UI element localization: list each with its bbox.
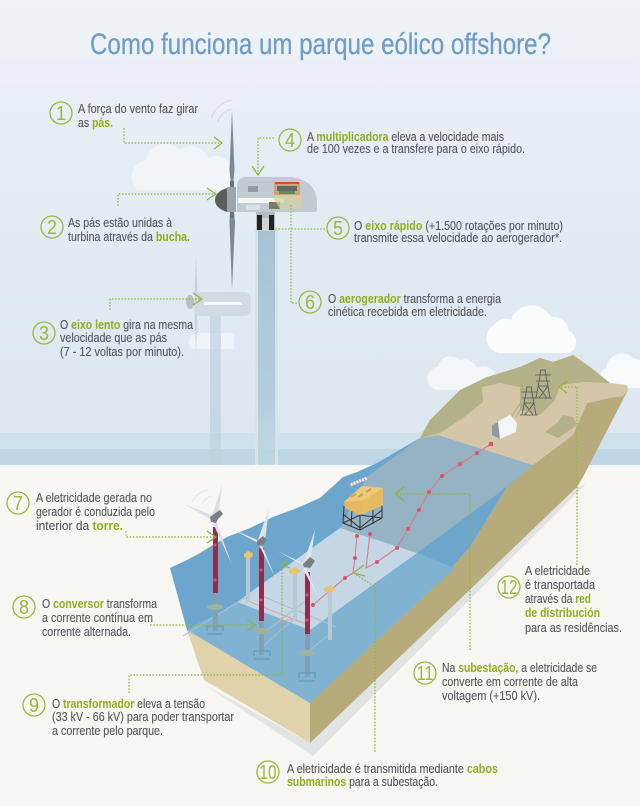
offshore turbine 2 — [232, 508, 275, 659]
step 9 — [23, 694, 234, 738]
beach — [420, 355, 628, 465]
step 3: O eixo lento gira na mesma — [60, 318, 193, 332]
step 7: A eletricidade gerada no — [36, 491, 152, 505]
step 4: de 100 vezes e a transfere para o eixo rápido. — [307, 142, 525, 156]
step 1: 1 — [56, 103, 66, 125]
large turbine — [211, 100, 317, 465]
gearbox — [274, 182, 300, 195]
step 4: A multiplicadora eleva a velocidade mais — [307, 130, 504, 144]
step 5: transmite essa velocidade ao aerogerador*. — [354, 231, 562, 245]
step 12: é transportada — [525, 578, 595, 592]
cable lane — [237, 528, 417, 630]
small pylons with transformers — [244, 551, 336, 640]
step 11: converte em corrente de alta — [442, 675, 578, 689]
blades — [230, 110, 235, 290]
background sky — [0, 0, 640, 433]
step 8: a corrente contínua em — [42, 611, 153, 625]
leader 8 — [150, 619, 256, 631]
step 9: (33 kV - 66 kV) para poder transportar — [52, 710, 234, 724]
offshore substation platform — [343, 478, 383, 530]
step 5 — [327, 217, 563, 245]
step 4: 4 — [285, 130, 295, 152]
leader 9 — [129, 559, 290, 693]
step 2: turbina através da bucha. — [68, 230, 190, 244]
wind arcs — [211, 100, 232, 122]
leader 5 — [274, 228, 325, 230]
foreground ground — [0, 465, 640, 806]
step 9: 9 — [29, 695, 39, 717]
nacelle — [237, 177, 317, 212]
leader 12 — [559, 381, 577, 565]
shallow water front — [187, 553, 455, 703]
step 7: 7 — [13, 493, 23, 515]
leader 10 — [353, 565, 375, 752]
step 6: cinética recebida em eletricidade. — [328, 305, 487, 319]
leader 3 — [110, 293, 202, 310]
tower — [258, 230, 275, 465]
step 10: 10 — [260, 762, 276, 784]
step 6 — [299, 291, 501, 319]
transmission pylons — [512, 370, 552, 418]
step 1 — [50, 102, 198, 130]
step 12: de distribución — [525, 606, 600, 620]
small distant turbine — [186, 252, 251, 465]
step 5: O eixo rápido (+1.500 rotações por minuto) — [354, 219, 563, 233]
step 12: através da red — [525, 592, 591, 606]
clouds — [132, 144, 640, 390]
step 1: as pás. — [78, 116, 113, 130]
hub — [215, 188, 227, 212]
substation house — [492, 415, 517, 439]
tower current markers — [213, 543, 309, 622]
step 8 — [13, 596, 157, 639]
offshore turbine 1 — [184, 485, 232, 634]
step 2 — [41, 216, 190, 244]
step 4 — [279, 129, 525, 156]
step 9: a corrente pelo parque. — [52, 724, 163, 738]
step 8: O conversor transforma — [42, 597, 157, 611]
step 11: Na subestação, a eletricidade se — [442, 661, 597, 675]
step 3: velocidade que as pás — [60, 331, 167, 345]
step 8: corrente alternada. — [42, 625, 131, 639]
step 12: 12 — [500, 577, 518, 599]
step 1: A força do vento faz girar — [78, 102, 198, 116]
lane grid cables — [183, 596, 336, 654]
step 9: O transformador eleva a tensão — [52, 697, 205, 711]
step 6: 6 — [305, 292, 315, 314]
step 11: 11 — [416, 663, 434, 685]
step 2: 2 — [47, 217, 57, 239]
leader 1 — [124, 128, 222, 149]
hill vegetation — [420, 355, 610, 438]
step 3: 3 — [39, 323, 49, 345]
leader 4 — [252, 138, 274, 175]
continental shelf — [340, 435, 533, 553]
step 11 — [414, 661, 597, 703]
step 12: para as residências. — [525, 621, 622, 635]
step 8: 8 — [19, 597, 29, 619]
step 10: A eletricidade é transmitida mediante cabos — [287, 762, 498, 776]
seabed front face — [187, 630, 310, 743]
offshore turbine 3 — [277, 530, 318, 681]
land side face — [310, 390, 628, 743]
leader 11 — [395, 487, 470, 650]
step 7: interior da torre. — [36, 519, 123, 533]
step 12: A eletricidade — [525, 564, 590, 578]
step 11: voltagem (+150 kV). — [442, 689, 540, 703]
sea horizon — [0, 433, 640, 465]
step 3 — [33, 318, 193, 359]
step 7 — [7, 491, 155, 533]
step 7: gerador é conduzida pelo — [36, 505, 155, 519]
step 10: submarinos para a subestação. — [287, 775, 438, 789]
leader 6 — [291, 205, 297, 303]
leader 7 — [126, 531, 216, 543]
submarine cables — [248, 442, 493, 625]
leader 2 — [118, 188, 216, 206]
step 6: O aerogerador transforma a energia — [328, 292, 501, 306]
step 3: (7 - 12 voltas por minuto). — [60, 345, 184, 359]
block shadow — [203, 484, 586, 756]
deep water — [170, 438, 533, 703]
step 5: 5 — [333, 218, 343, 240]
step 10 — [257, 761, 498, 789]
step 12 — [498, 564, 622, 635]
step 2: As pás estão unidas à — [68, 216, 172, 230]
